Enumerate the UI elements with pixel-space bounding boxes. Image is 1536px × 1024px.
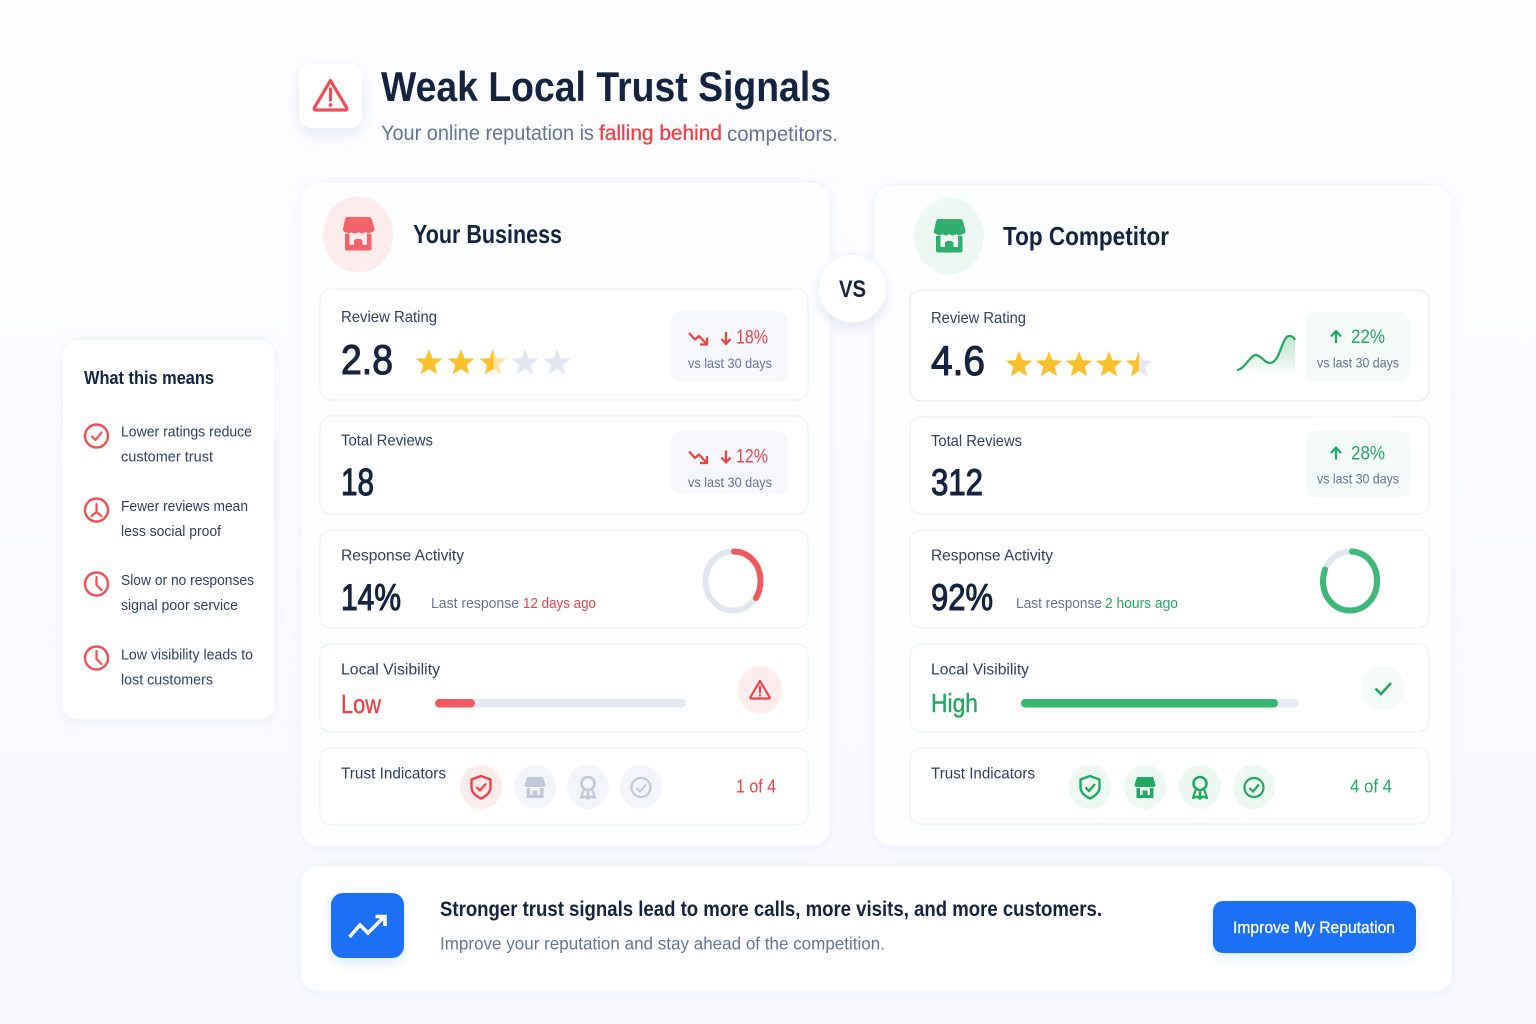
item: fewer reviews: less social proof [121, 524, 222, 540]
donut chart: 14% [706, 552, 760, 610]
item: slow responses [85, 572, 254, 614]
row: local visibility: Local Visibility [341, 662, 440, 678]
headline: Stronger trust signals lead to more calls, more visits, and more customers. [440, 898, 1102, 921]
item: low visibility: lost customers [121, 672, 213, 688]
delta badge: +28% [1305, 431, 1410, 497]
donut chart: 92% [1323, 552, 1377, 610]
icon: store inactive [514, 765, 556, 809]
panel: what this means [62, 339, 275, 720]
sparkline [1237, 336, 1295, 376]
progress bar: low [435, 699, 686, 708]
item: lower ratings: customer trust [121, 450, 213, 466]
row: response activity [320, 530, 808, 628]
last response: 12 days ago [523, 596, 596, 612]
row: local visibility [320, 644, 808, 732]
last response: Last response [1016, 596, 1102, 612]
row: total reviews [910, 417, 1429, 514]
delta badge: +28%: vs last 30 days [1317, 470, 1399, 486]
reviews value: 18 [341, 462, 374, 504]
last response [1016, 596, 1178, 612]
row: review rating: Review Rating [341, 309, 437, 326]
delta badge: -12%: vs last 30 days [688, 474, 772, 490]
rating value: 2.8 [341, 336, 393, 383]
delta badge: +22%: vs last 30 days [1317, 354, 1399, 370]
subtitle [381, 122, 838, 146]
icon: red store [323, 196, 393, 272]
delta badge: -18% [671, 311, 788, 382]
response value: 92% [931, 577, 993, 618]
item: low visibility: Low visibility leads to [121, 648, 253, 664]
row: local visibility: Local Visibility [931, 662, 1029, 678]
subtitle: Your online reputation is [381, 122, 594, 145]
item: slow responses: Slow or no responses [121, 573, 254, 589]
panel: top competitor [874, 185, 1451, 846]
delta badge: -12%: 12% [736, 446, 768, 468]
star rating [416, 349, 570, 374]
item: fewer reviews: Fewer reviews mean [121, 499, 248, 515]
row: review rating [910, 290, 1429, 401]
icon: green store [914, 198, 984, 274]
panel heading: top competitor: Top Competitor [1003, 221, 1169, 251]
row: total reviews [320, 416, 808, 514]
row: trust indicators [910, 748, 1429, 824]
icon: alert badge [738, 666, 782, 714]
count: 1 of 4: 1 of 4 [736, 776, 776, 796]
rating value: 4.6 [931, 337, 985, 384]
row: response activity: Response Activity [341, 548, 464, 564]
delta badge: +28%: 28% [1351, 444, 1385, 464]
row: review rating: Review Rating [931, 310, 1026, 327]
subtitle: competitors. [727, 123, 838, 146]
icon: shield [1069, 765, 1111, 809]
row: response activity [910, 530, 1429, 628]
row: total reviews: Total Reviews [341, 432, 433, 450]
badge: VS [818, 254, 886, 322]
icon: ribbon inactive [567, 765, 609, 809]
supporting text: Improve your reputation and stay ahead of the competition. [440, 934, 885, 954]
last response: 2 hours ago [1105, 596, 1178, 612]
row: local visibility [910, 644, 1429, 732]
panel heading: your business: Your Business [413, 219, 562, 249]
icon: ribbon [1179, 765, 1221, 809]
icon: check [1233, 765, 1275, 809]
delta badge: -18%: vs last 30 days [688, 355, 772, 371]
item: fewer reviews [85, 498, 248, 540]
visibility value: High [931, 688, 978, 718]
title: Weak Local Trust Signals [381, 63, 831, 110]
item: lower ratings [85, 424, 252, 466]
icon: store [1124, 765, 1166, 809]
star rating [1006, 351, 1152, 376]
icon: check inactive [620, 765, 662, 809]
row: trust indicators: Trust Indicators [341, 766, 446, 782]
last response: Last response [431, 596, 519, 612]
button: improve my reputation [1213, 901, 1416, 953]
badge: VS: VS [839, 276, 866, 303]
panel: your business [301, 182, 830, 846]
last response [431, 596, 596, 612]
item: lower ratings: Lower ratings reduce [121, 424, 252, 440]
count: 4 of 4: 4 of 4 [1350, 776, 1392, 796]
response value: 14% [341, 577, 401, 618]
icon: shield active [460, 765, 502, 809]
reviews value: 312 [931, 462, 983, 503]
panel heading: What this means [84, 367, 214, 388]
item: slow responses: signal poor service [121, 598, 238, 614]
subtitle: falling behind [599, 122, 722, 145]
row: response activity: Response Activity [931, 548, 1053, 564]
delta badge: -18%: 18% [736, 328, 768, 348]
header [299, 63, 838, 146]
delta badge: +22% [1305, 312, 1410, 382]
panel: call to action [301, 866, 1452, 991]
row: trust indicators: Trust Indicators [931, 766, 1035, 782]
delta badge: -12% [671, 431, 788, 494]
icon: check badge [1362, 665, 1404, 711]
row: total reviews: Total Reviews [931, 433, 1022, 450]
progress bar: high [1021, 699, 1299, 708]
item: low visibility [85, 646, 253, 688]
row: trust indicators [320, 748, 808, 825]
row: review rating [320, 289, 808, 400]
visibility value: Low [341, 689, 381, 719]
icon: trending up tile [331, 893, 404, 958]
icon: warning tile [299, 64, 362, 128]
delta badge: +22%: 22% [1351, 327, 1385, 348]
button: improve my reputation: Improve My Reputation [1233, 918, 1395, 937]
